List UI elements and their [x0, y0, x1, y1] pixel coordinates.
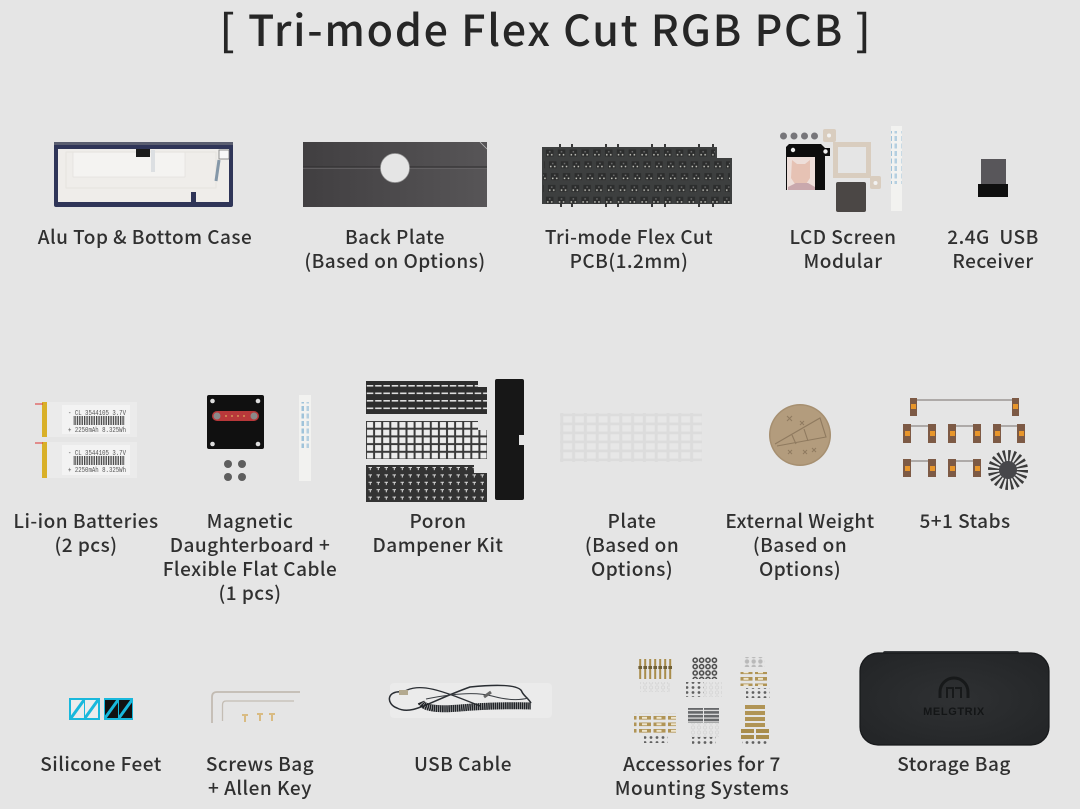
label: Storage Bag	[897, 750, 1011, 777]
label: (Based on	[753, 531, 847, 558]
label: Options)	[759, 555, 841, 582]
icon: poron foam sheets	[366, 379, 524, 502]
label: Poron	[409, 507, 467, 534]
label: Silicone Feet	[40, 750, 162, 777]
label: Flexible Flat Cable	[163, 555, 337, 582]
label: Tri-mode Flex Cut	[545, 223, 713, 250]
icon: plate	[560, 413, 702, 462]
label: Options)	[591, 555, 673, 582]
item: Poron Dampener Kit	[366, 379, 524, 558]
item: Li-ion Batteries	[13, 402, 159, 558]
icon: batteries: - CL 3544105 3.7V	[68, 450, 126, 458]
label: Mounting Systems	[615, 774, 789, 801]
label: USB Cable	[414, 750, 512, 777]
label: (2 pcs)	[55, 531, 117, 558]
icon: daughterboard	[207, 395, 311, 481]
item: PCB	[542, 144, 732, 274]
icon: USB receiver	[978, 159, 1008, 197]
item: Back Plate	[303, 142, 487, 274]
label: Plate	[608, 507, 656, 534]
icon: back plate	[303, 142, 487, 207]
item: 5+1 Stabs	[903, 398, 1025, 534]
icon: mounting accessories	[634, 657, 770, 746]
label: Receiver	[952, 247, 1034, 274]
icon: PCB	[542, 144, 732, 207]
label: Magnetic	[207, 507, 293, 534]
icon: coiled USB cable	[389, 683, 552, 718]
label: External Weight	[725, 507, 875, 534]
label: Alu Top & Bottom Case	[38, 223, 252, 250]
label: LCD Screen	[790, 223, 896, 250]
label: (1 pcs)	[219, 579, 281, 606]
label: Modular	[804, 247, 882, 274]
icon: batteries: + 2250mAh 8.325Wh	[68, 467, 126, 475]
icon: keyboard case	[54, 142, 233, 207]
item: USB Receiver	[947, 159, 1039, 274]
icon: stabilizers and brush	[903, 398, 1025, 484]
icon: weight coin	[769, 404, 831, 466]
item: Silicone Feet	[40, 698, 162, 777]
label: Back Plate	[345, 223, 445, 250]
label: 2.4G USB	[947, 223, 1039, 250]
icon: batteries: - CL 3544105 3.7V	[68, 410, 126, 418]
icon: LCD parts	[780, 126, 902, 212]
item: USB Cable	[389, 683, 552, 777]
item: Screws Bag + Allen Key	[206, 692, 314, 801]
label: + Allen Key	[208, 774, 312, 801]
label: (Based on	[585, 531, 679, 558]
item: External Weight	[725, 404, 875, 582]
item: Accessories for 7 Mounting Systems	[615, 657, 789, 801]
icon: batteries: + 2250mAh 8.325Wh	[68, 427, 126, 435]
label: 5+1 Stabs	[919, 507, 1011, 534]
label: Screws Bag	[206, 750, 314, 777]
label: Dampener Kit	[373, 531, 503, 558]
icon: batteries	[35, 402, 137, 478]
item: Magnetic Daughterboard	[163, 395, 337, 606]
icon: storage case	[860, 651, 1049, 745]
item: LCD Screen Modular	[780, 126, 902, 274]
item: Storage Bag	[860, 651, 1049, 777]
icon: allen keys and screws	[212, 692, 300, 723]
item: Alu Top & Bottom Case	[38, 142, 252, 250]
label: PCB(1.2mm)	[570, 247, 688, 274]
item: Plate	[560, 413, 702, 582]
label: Li-ion Batteries	[13, 507, 159, 534]
label: Daughterboard +	[170, 531, 330, 558]
label: (Based on Options)	[304, 247, 486, 274]
label: Accessories for 7	[623, 750, 781, 777]
icon: silicone feet	[69, 698, 133, 720]
icon: storage case: MELGTRIX	[923, 706, 985, 718]
